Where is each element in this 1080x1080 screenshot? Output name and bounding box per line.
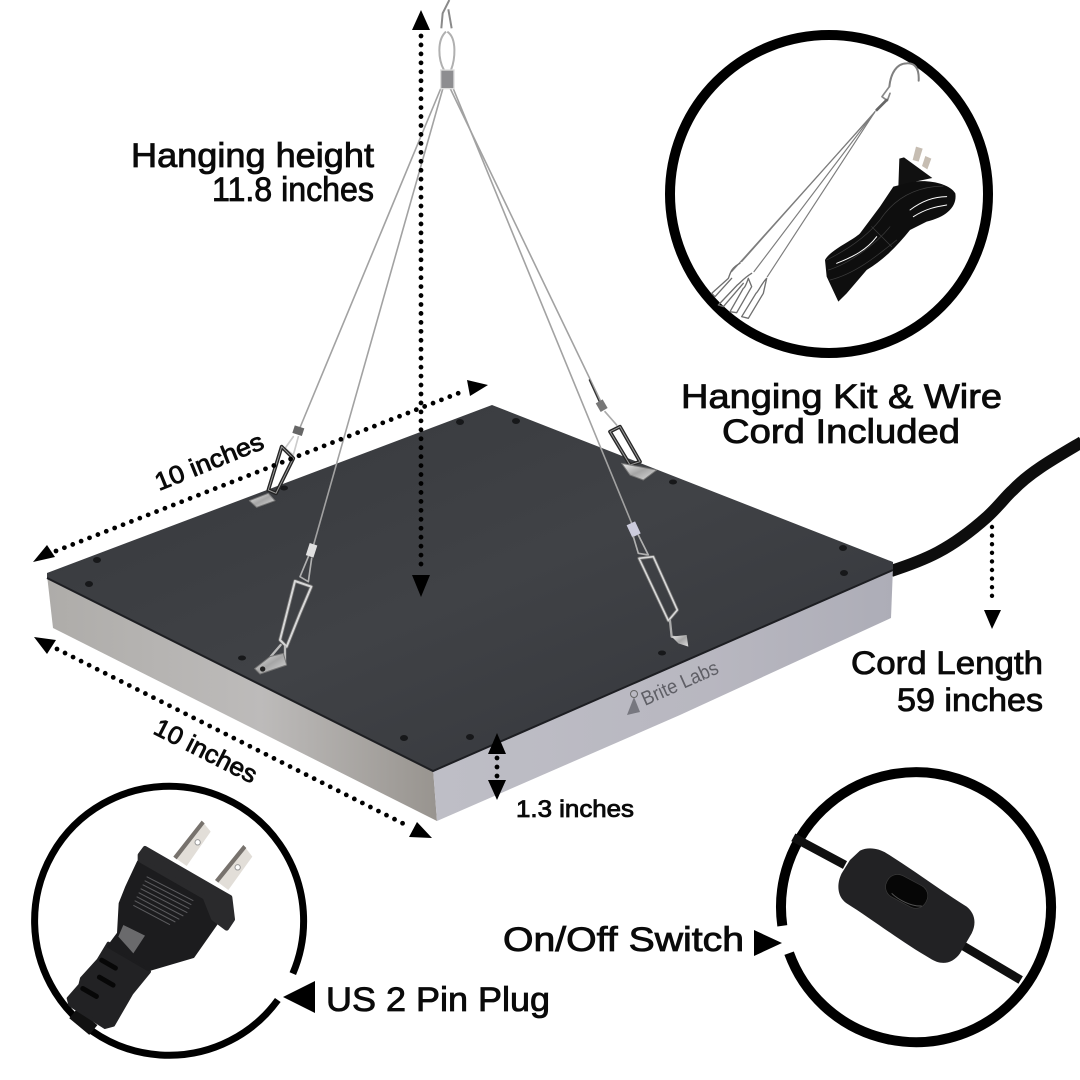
label: cord length: Cord Length: [851, 645, 1043, 681]
back left clip: [249, 425, 304, 507]
hanging wires: [299, 88, 632, 547]
label: front 10 inches: 10 inches: [149, 713, 262, 789]
label: hanging kit: [681, 378, 1002, 451]
label: hanging height: 11.8 inches: [212, 171, 374, 209]
brite labs logo: Brite Labs: [638, 657, 722, 711]
label: hanging height: [131, 137, 375, 209]
panel: switch circle: [781, 772, 1051, 1042]
back right clip: [589, 380, 657, 480]
label: cord length: 59 inches: [897, 682, 1043, 718]
panel left side face: [47, 575, 437, 821]
label: hanging kit: Cord Included: [722, 413, 960, 451]
label: cord length: [851, 645, 1043, 718]
label: plug: US 2 Pin Plug: [326, 981, 550, 1019]
dimension arrow: hanging height: [412, 10, 430, 597]
label: hanging kit: Hanging Kit & Wire: [681, 378, 1002, 416]
arrow: switch pointer: [754, 930, 782, 956]
panel: hanging kit circle: [670, 35, 988, 353]
panel: plug circle: [35, 786, 304, 1055]
label: thickness: 1.3 inches: [516, 796, 634, 823]
arrow: plug pointer: [283, 981, 315, 1013]
icon: coiled cord: [825, 181, 956, 302]
dimension arrow: front width: [34, 637, 432, 838]
label: back 10 inches: 10 inches: [151, 428, 268, 497]
panel top face: [47, 405, 893, 771]
icon: wire carabiners: [712, 263, 767, 318]
icon: switch cables: [793, 837, 1021, 980]
front left clip: [255, 543, 317, 674]
wire clips: [249, 380, 688, 674]
panel screws: [85, 418, 848, 741]
icon: four hanging wires: [732, 112, 875, 277]
icon: plug body: [68, 848, 233, 1030]
panel right side face: [433, 567, 893, 821]
icon: rocker button: [882, 870, 932, 912]
label: on off switch: On/Off Switch: [503, 921, 744, 959]
label: hanging height: Hanging height: [131, 137, 375, 175]
front right clip: [627, 521, 688, 647]
icon: plug blades: [173, 821, 252, 890]
dimension arrow: thickness: [488, 733, 506, 800]
LED panel: [47, 405, 893, 821]
dimension arrow: back width: [33, 380, 488, 562]
power cord leaving panel: [891, 442, 1080, 571]
icon: coiled cord plug: [898, 147, 932, 187]
icon: inline switch: [838, 848, 974, 963]
icon: hook: [889, 63, 919, 87]
dimension arrow: cord length: [984, 527, 1001, 629]
top hook and ferrule: [439, 0, 454, 89]
